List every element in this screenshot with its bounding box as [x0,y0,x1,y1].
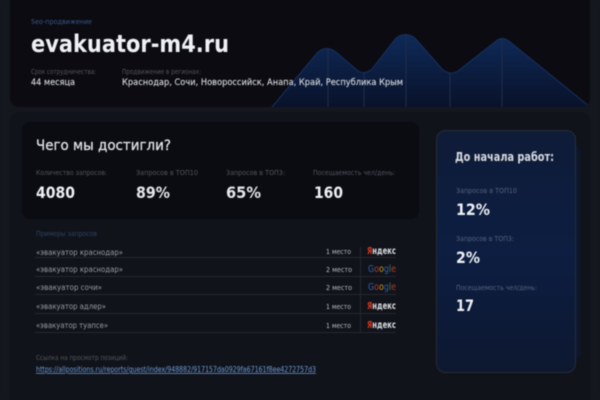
row 4: Яндекс [367,301,396,312]
row 1: «эвакуатор краснодар» [36,248,123,257]
metric: before top 3 [456,235,514,267]
regions label: Продвижение в регионах: [122,68,201,76]
panel: achievements [22,122,419,219]
row 4: 1 место [326,303,351,311]
metric: before top 10: 12% [456,200,490,219]
row 2 [36,264,396,275]
heading: before work: До начала работ: [455,150,554,164]
row 1 [36,246,396,257]
metric: queries [36,169,107,202]
row 2: «эвакуатор краснодар» [36,265,123,274]
metric: top 10 [136,169,198,202]
row 3: «эвакуатор сочи» [36,283,102,292]
heading: achievements: Чего мы достигли? [36,138,171,154]
eyebrow label: Seo-продвижение [31,18,92,26]
metric: before top 10: Запросов в ТОП10 [456,187,517,195]
row 1: Яндекс [367,246,396,257]
row 2: 2 место [326,266,352,274]
row 3 [36,282,396,293]
row 3: 2 место [326,284,352,292]
row 1: 1 место [326,248,351,256]
metric: top 10: Запросов в ТОП10 [136,169,198,177]
regions value: Краснодар, Сочи, Новороссийск, Анапа, Край, Республика Крым [122,78,403,88]
metric: before visitors [456,284,537,315]
metric: before top 3: Запросов в ТОП3: [456,235,514,243]
row 4 [36,301,396,312]
metric: before top 3: 2% [456,248,480,267]
metric: visitors: Посещаемость чел/день: [313,169,395,177]
row 5: «эвакуатор туапсе» [36,321,108,330]
panel: main [10,112,590,400]
metric: queries: Количество запросов: [36,169,107,177]
row 5: 1 место [326,322,351,330]
metric: before visitors: 17 [456,296,474,315]
panel: header [10,0,590,107]
metric: top 3: Запросов в ТОП3: [226,169,285,177]
link url: https://allpositions.ru/reports/guest/index/948882/917157da0929fa67161f8ee4272757d3 [36,365,316,374]
term label: Срок сотрудничества: [31,68,96,76]
metric: top 10: 89% [136,183,170,202]
metric: top 3: 65% [226,183,261,202]
table: sample queries [35,230,396,332]
row 5: Яндекс [367,320,396,331]
panel: before work [436,130,581,372]
site title: evakuator-m4.ru [31,30,229,58]
row 3: Google [368,282,396,293]
table heading: Примеры запросов [36,230,97,238]
link block [36,354,316,374]
metric: top 3 [226,169,285,202]
row 4: «эвакуатор адлер» [36,302,106,311]
metric: queries: 4080 [36,183,75,202]
term value: 44 месяца [31,78,75,88]
metric: visitors [313,169,395,202]
metric: visitors: 160 [314,183,343,202]
row 5 [36,320,396,331]
row 2: Google [368,264,396,275]
metric: before visitors: Посещаемость чел/день: [456,284,537,292]
link label: Ссылка на просмотр позиций: [36,354,128,362]
chart: mountain area graph [272,34,590,107]
metric: before top 10 [456,187,517,219]
